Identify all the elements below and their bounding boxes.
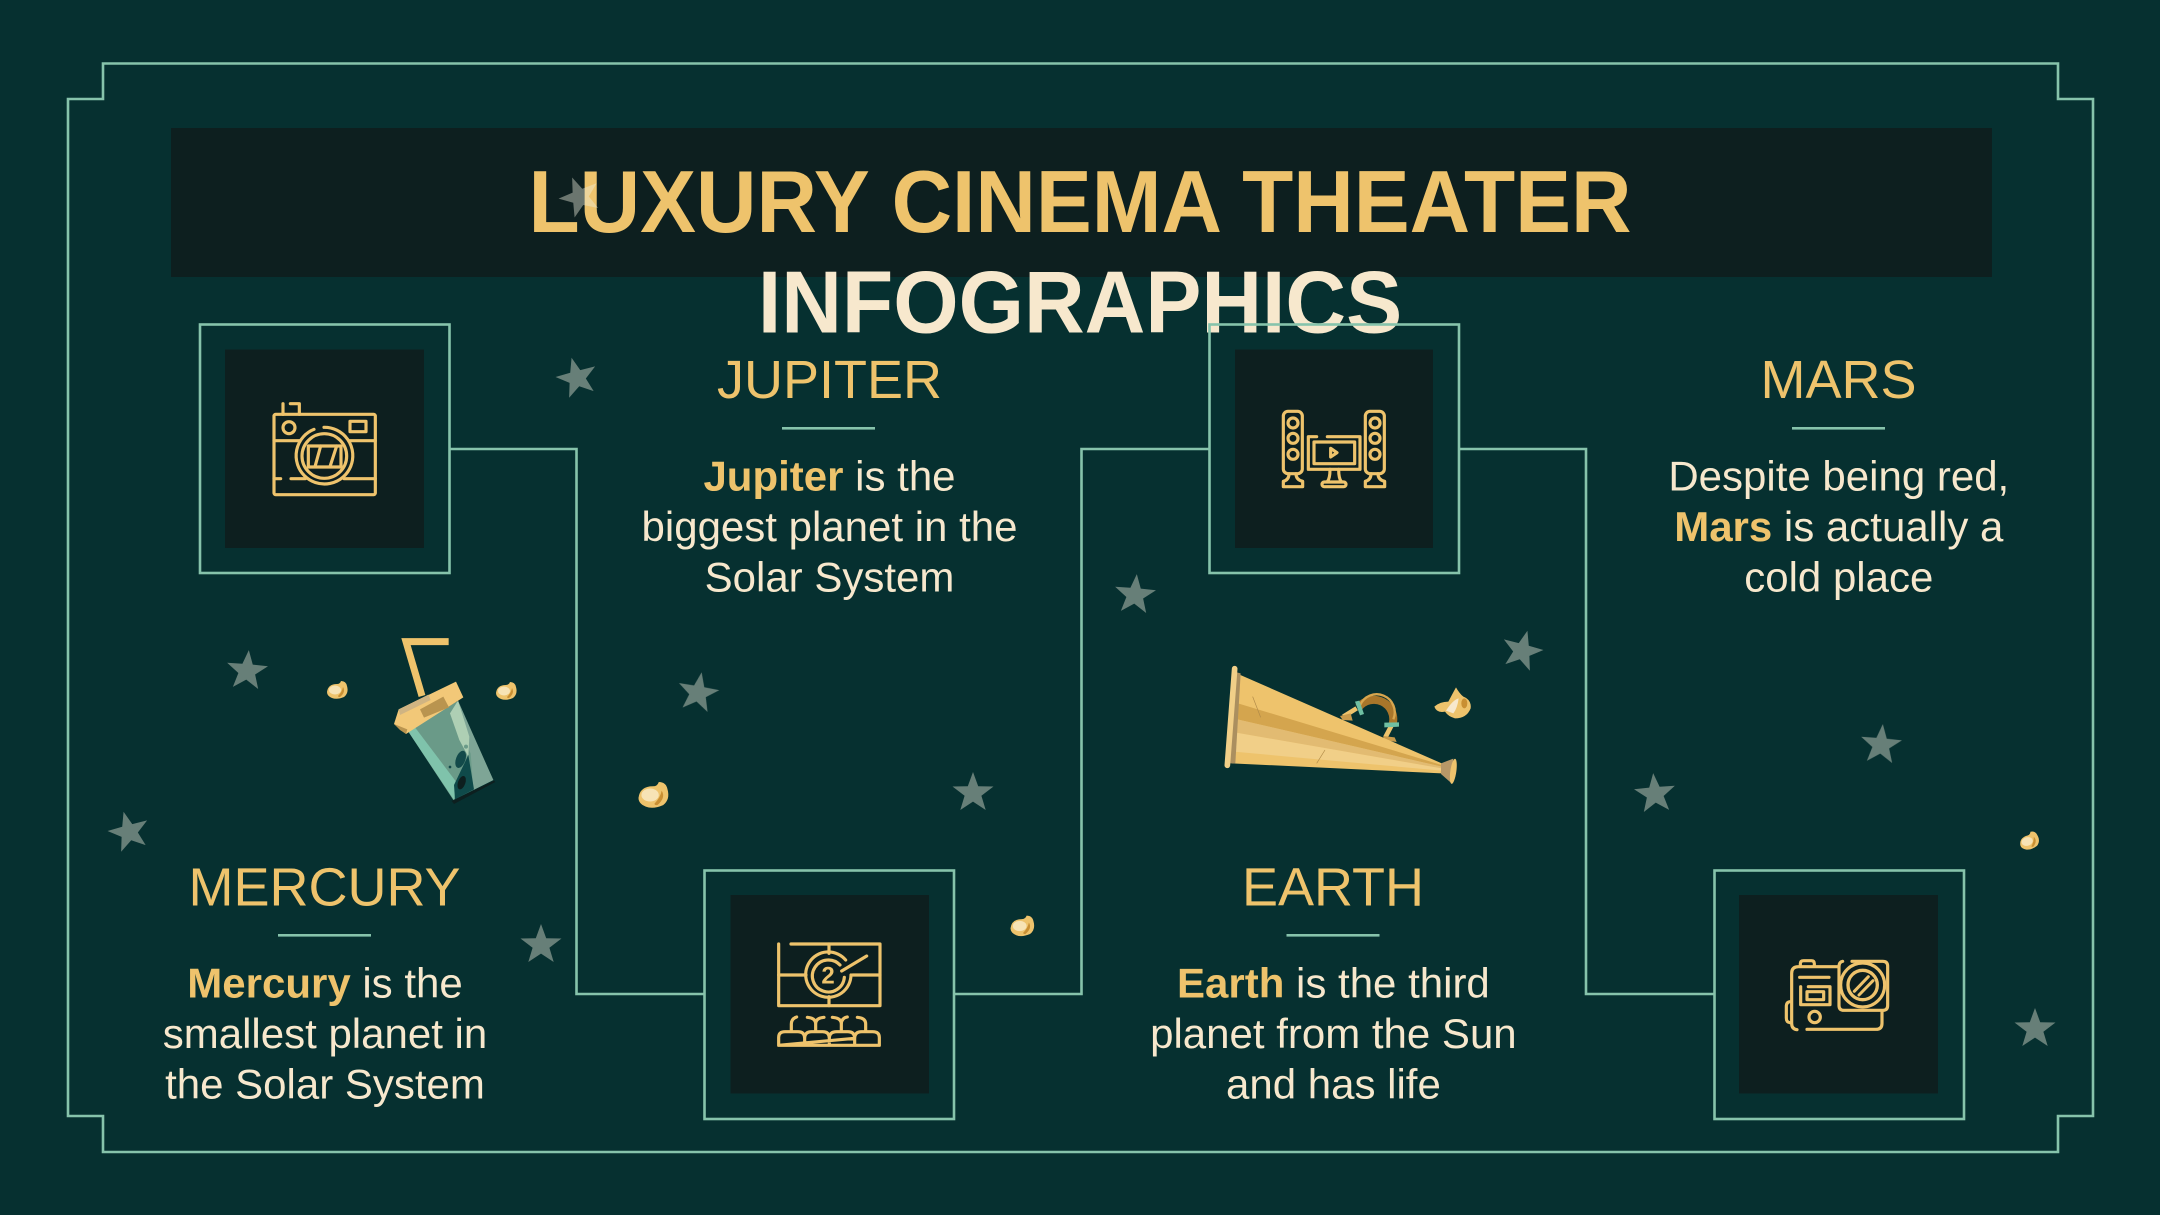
- text block: Jupiter: Solar System: [705, 554, 954, 601]
- text block: Mars: Mars is actually a: [1674, 503, 2004, 550]
- illustration: megaphone: [1227, 669, 1458, 784]
- title: LUXURY CINEMA THEATER: [529, 153, 1631, 251]
- text block: Mercury: smallest planet in: [163, 1010, 487, 1057]
- text block: Mars: cold place: [1744, 554, 1933, 601]
- connector lines: [450, 449, 1714, 994]
- text block: Jupiter: JUPITER: [717, 350, 942, 410]
- text block: Mars: [1668, 350, 2009, 601]
- icon: countdown screen and seats: 2: [821, 963, 835, 990]
- panel: cinema screen icon box: [704, 870, 954, 1119]
- text block: Jupiter: Jupiter is the: [703, 453, 956, 500]
- title banner: [171, 128, 1992, 277]
- text block: Jupiter: [642, 350, 1017, 601]
- decorative stars: [104, 170, 2056, 1046]
- icon: large popcorn: [1434, 687, 1471, 718]
- icon: popcorn kernels: [327, 681, 2041, 936]
- panel: camera icon box: [200, 324, 450, 573]
- text block: Mercury: [163, 858, 487, 1108]
- text block: Earth: Earth is the third: [1177, 960, 1490, 1007]
- text block: Mercury: MERCURY: [188, 858, 461, 918]
- title: INFOGRAPHICS: [758, 254, 1402, 352]
- text block: Earth: planet from the Sun: [1150, 1010, 1517, 1057]
- icon: action camera: [1786, 961, 1888, 1030]
- text block: Earth: and has life: [1226, 1061, 1441, 1108]
- text block: Earth: [1150, 858, 1517, 1108]
- title: [529, 153, 1631, 352]
- panel: action camera icon box: [1714, 870, 1964, 1119]
- text block: Mercury: the Solar System: [165, 1061, 485, 1108]
- illustration: soda cup: [394, 642, 495, 804]
- icon: countdown screen and seats: [779, 944, 880, 1045]
- icon: photo camera: [274, 404, 375, 495]
- text block: Earth: EARTH: [1242, 858, 1424, 918]
- text block: Mars: Despite being red,: [1668, 453, 2009, 500]
- icon: home theater speakers and monitor: [1283, 411, 1385, 487]
- text block: Mercury: Mercury is the: [187, 960, 463, 1007]
- text block: Jupiter: biggest planet in the: [642, 503, 1017, 550]
- panel: speakers icon box: [1210, 324, 1459, 573]
- text block: Mars: MARS: [1760, 350, 1917, 410]
